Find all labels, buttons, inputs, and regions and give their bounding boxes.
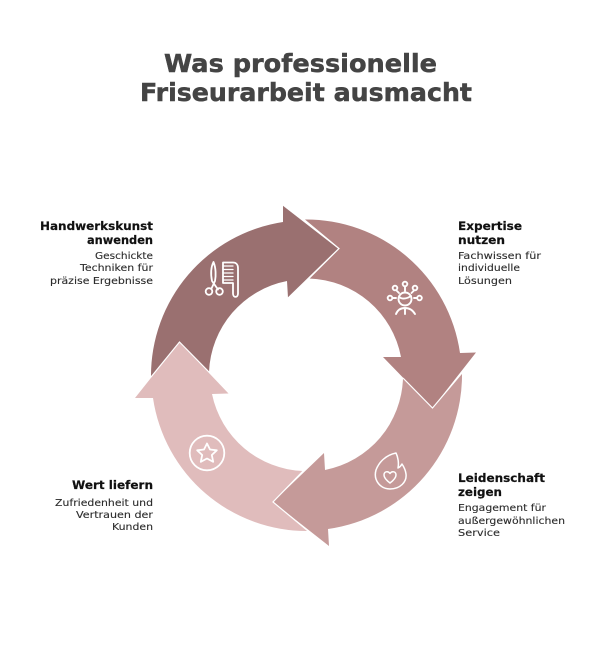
text block: Expertise nutzen: nutzen bbox=[458, 233, 505, 247]
text block: Expertise nutzen: Fachwissen für bbox=[458, 251, 542, 262]
arrow: Leidenschaft zeigen bbox=[273, 373, 462, 546]
text block: Expertise nutzen: Expertise bbox=[458, 219, 522, 233]
text block: Handwerkskunst anwenden: präzise Ergebnisse bbox=[50, 276, 153, 287]
text block: Leidenschaft zeigen: zeigen bbox=[458, 485, 502, 499]
text block: Leidenschaft zeigen bbox=[458, 471, 565, 539]
text block: Leidenschaft zeigen: Engagement für bbox=[458, 503, 547, 514]
cycle diagram bbox=[135, 205, 476, 546]
text block: Handwerkskunst anwenden: Geschickte bbox=[95, 251, 153, 262]
arrow: Wert liefern bbox=[135, 342, 308, 531]
icon: flame with heart bbox=[375, 453, 406, 489]
text block: Expertise nutzen: Lösungen bbox=[458, 276, 512, 287]
title: Was professionelle bbox=[164, 49, 437, 78]
text block: Handwerkskunst anwenden: Techniken für bbox=[79, 263, 154, 274]
text block: Wert liefern: Zufriedenheit und bbox=[55, 498, 153, 509]
text block: Wert liefern bbox=[55, 478, 154, 533]
text block: Leidenschaft zeigen: Service bbox=[458, 528, 500, 539]
text block: Leidenschaft zeigen: außergewöhnlichen bbox=[458, 516, 565, 527]
text block: Expertise nutzen: individuelle bbox=[458, 263, 520, 274]
icon: person with ideas bbox=[388, 282, 422, 314]
text block: Wert liefern: Vertrauen der bbox=[76, 510, 154, 521]
icon: scissors and comb bbox=[206, 262, 238, 297]
text block: Wert liefern: Wert liefern bbox=[72, 478, 153, 492]
title bbox=[140, 49, 472, 107]
text block: Handwerkskunst anwenden: anwenden bbox=[87, 233, 153, 247]
title: Friseurarbeit ausmacht bbox=[140, 78, 472, 107]
text block: Expertise nutzen bbox=[458, 219, 542, 287]
text block: Wert liefern: Kunden bbox=[112, 522, 153, 533]
text block: Leidenschaft zeigen: Leidenschaft bbox=[458, 471, 546, 485]
arrow: Expertise nutzen bbox=[304, 219, 476, 408]
text block: Handwerkskunst anwenden bbox=[40, 219, 154, 287]
icon: star in circle bbox=[190, 436, 224, 470]
text block: Handwerkskunst anwenden: Handwerkskunst bbox=[40, 219, 154, 233]
arrow: Handwerkskunst anwenden bbox=[151, 205, 339, 377]
